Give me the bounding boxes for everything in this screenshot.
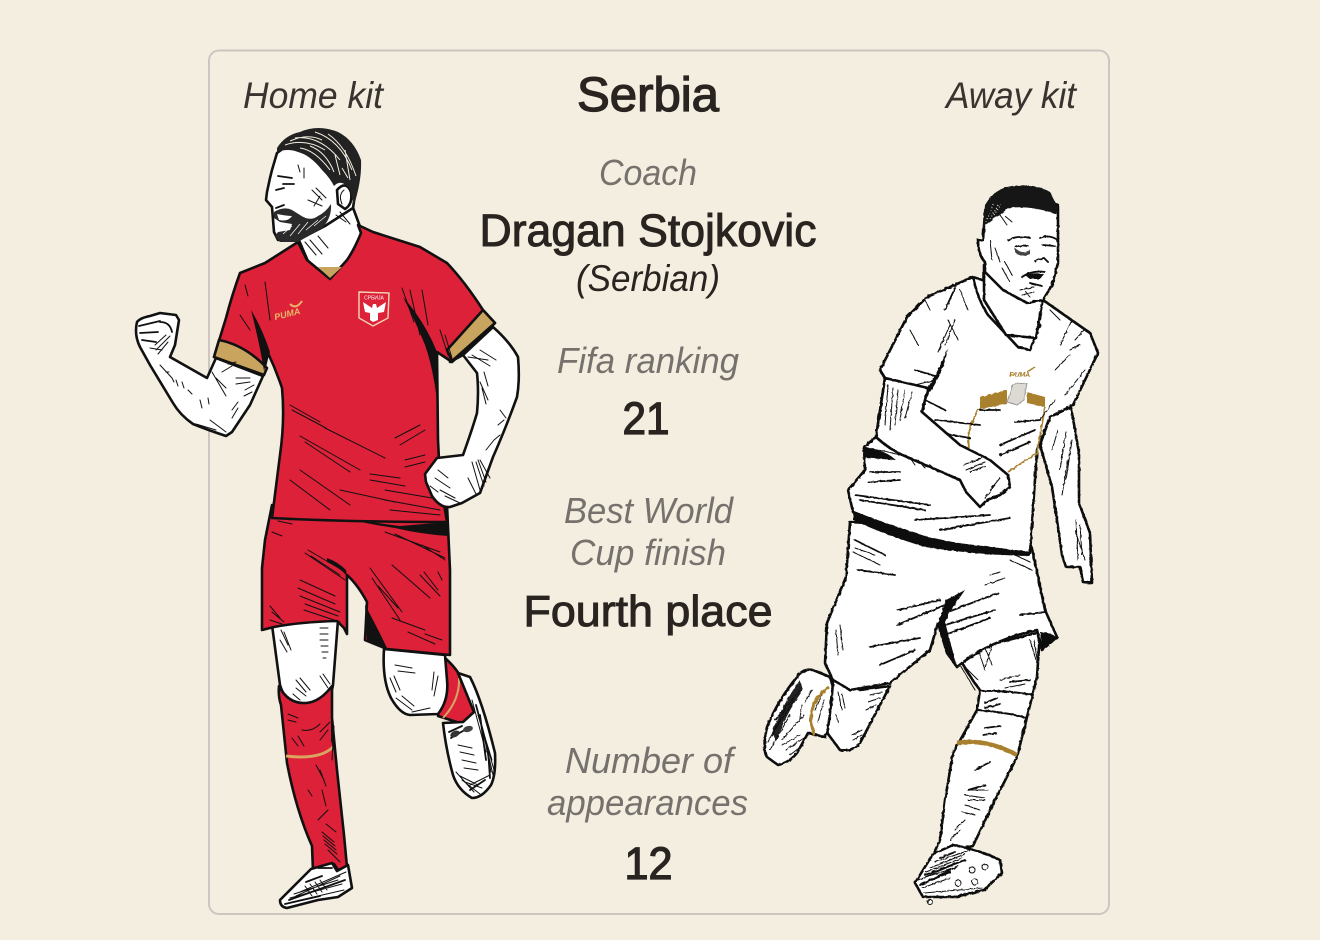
- shirt gold panel: PUMA: [1010, 372, 1030, 379]
- best World Cup finish block: Fourth place: [524, 587, 772, 636]
- hair: [277, 128, 361, 205]
- collar: [973, 277, 1040, 350]
- right arm with hand: [425, 327, 519, 507]
- head: face and beard: [266, 128, 361, 255]
- Fifa ranking block: Fifa ranking: [557, 340, 739, 381]
- front leg and boot: [915, 632, 1040, 904]
- number of appearances block: [547, 740, 748, 889]
- shorts: [262, 505, 450, 655]
- collar gold: [1001, 324, 1037, 338]
- neck: [984, 265, 1043, 338]
- coach block: (Serbian): [576, 258, 720, 299]
- right sleeve band: [447, 310, 495, 361]
- coach block: Coach: [599, 152, 697, 193]
- neck: [298, 205, 362, 279]
- puma logo: PUMA: [273, 306, 301, 322]
- back leg and boot: [384, 649, 495, 798]
- heading: Serbia: Serbia: [577, 69, 719, 122]
- Fifa ranking block: [557, 340, 739, 444]
- label: Away kit: Away kit: [944, 75, 1078, 116]
- crest: СРБИЈА: [364, 296, 384, 302]
- back leg and boot: [764, 670, 890, 765]
- left arm with fist: [136, 313, 263, 436]
- best World Cup finish block: [524, 490, 772, 636]
- shorts: [825, 522, 1057, 690]
- jersey: [214, 225, 495, 522]
- left arm with fist: [876, 378, 1010, 507]
- number of appearances block: 12: [624, 838, 672, 889]
- panel border: [209, 50, 1109, 914]
- illustration: away kit player: [764, 185, 1098, 904]
- coach block: Dragan Stojkovic: [480, 205, 816, 256]
- crest: [359, 292, 389, 326]
- best World Cup finish block: Best World: [564, 490, 734, 531]
- front leg: [272, 620, 352, 908]
- black waist band: [853, 511, 1030, 556]
- illustration: home kit player: [136, 128, 519, 908]
- shirt gold panel: [968, 367, 1045, 472]
- jersey body: [848, 277, 1098, 556]
- left sleeve band: [214, 340, 267, 375]
- beard: [274, 204, 331, 242]
- right arm with hand: [1040, 407, 1092, 583]
- head: [978, 185, 1058, 303]
- best World Cup finish block: Cup finish: [570, 532, 726, 573]
- number of appearances block: appearances: [547, 782, 748, 823]
- number of appearances block: Number of: [565, 740, 737, 781]
- coach block: [480, 152, 816, 299]
- Fifa ranking block: 21: [622, 393, 670, 444]
- label: Home kit: Home kit: [243, 75, 385, 116]
